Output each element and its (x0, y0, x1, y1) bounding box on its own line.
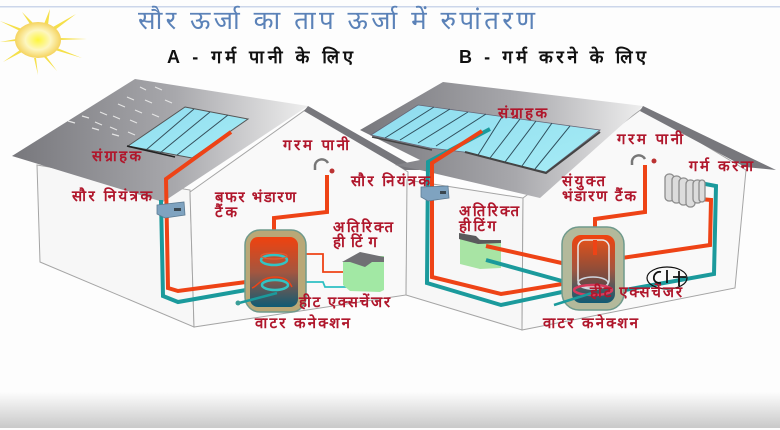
wall: left (406, 180, 523, 330)
labels: house B: सौर नियंत्रक (350, 172, 431, 190)
labels: house A: सौर नियंत्रक (71, 187, 153, 205)
combined storage tank (554, 227, 624, 310)
house A (12, 79, 420, 327)
wall: front (190, 108, 408, 327)
wall: front (522, 108, 746, 330)
house B (360, 82, 776, 330)
hot and cold pipes (427, 129, 716, 305)
labels: house B (350, 105, 754, 332)
labels: house B: संयुक्त (561, 173, 606, 191)
labels: house B: संग्राहक (497, 105, 548, 122)
auxiliary heating unit (342, 252, 384, 292)
labels: house B: वाटर कनेक्शन (542, 314, 639, 332)
wall: left (37, 165, 194, 327)
heading A: A - गर्म पानी के लिए (167, 46, 354, 67)
labels: house B: गर्म करना (688, 157, 754, 175)
labels: house A: बफर भंडारण (214, 189, 297, 206)
labels: house A: टैंक (214, 203, 238, 221)
title: सौर ऊर्जा का ताप ऊर्जा में रुपांतरण (138, 5, 536, 35)
bottom grey band (0, 392, 780, 428)
labels: house B: अतिरिक्त (459, 202, 520, 220)
roof shingles (68, 87, 172, 136)
labels: house B: हीट एक्सचेंजर (589, 283, 683, 301)
labels: house A: वाटर कनेक्शन (254, 314, 351, 332)
solar collectors (371, 105, 600, 173)
roof (12, 79, 308, 202)
labels: house B: हीटिंग (458, 217, 497, 235)
labels: house A: अतिरिक्त (333, 218, 394, 236)
heading B: B - गर्म करने के लिए (459, 46, 647, 67)
labels: house A: हीटिंग (332, 233, 378, 251)
handwritten mark (647, 267, 687, 289)
storage tank (236, 230, 306, 312)
labels: house B: गरम पानी (616, 130, 684, 148)
roof (360, 82, 643, 198)
solar collector (127, 107, 248, 158)
hot and cold pipes (161, 132, 348, 302)
hot water tap (632, 155, 656, 165)
labels: house A: गरम पानी (282, 136, 350, 154)
solar controller (421, 186, 449, 201)
auxiliary heating unit (459, 233, 501, 269)
icon: sun (0, 9, 87, 75)
labels: house A (71, 136, 394, 332)
hot water tap (315, 159, 334, 174)
labels: house A: हीट एक्सचेंजर (298, 293, 391, 311)
labels: house A: संग्राहक (91, 148, 142, 165)
labels: house B: भंडारण टैंक (562, 187, 637, 205)
solar controller (157, 202, 185, 218)
radiator (665, 174, 705, 207)
